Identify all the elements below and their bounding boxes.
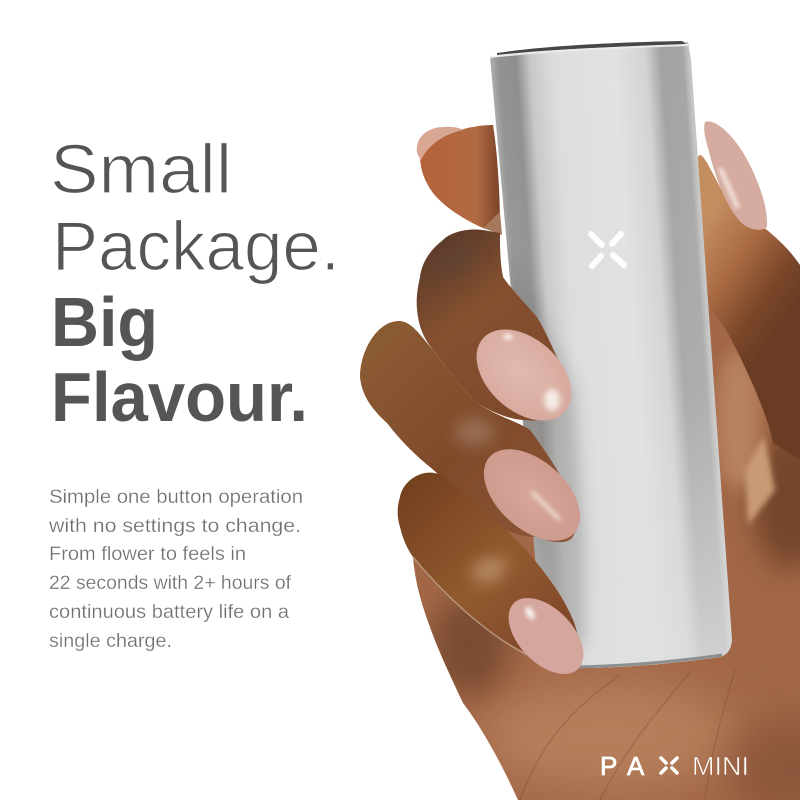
body text: 22 seconds with 2+ hours of	[49, 573, 292, 594]
headline: Flavour.	[51, 358, 308, 436]
hand photo illustration	[360, 41, 800, 800]
ring finger	[398, 473, 597, 688]
headline: Big	[51, 283, 158, 361]
index finger	[417, 230, 589, 439]
body text: single charge.	[49, 631, 172, 652]
body text: continuous battery life on a	[49, 602, 289, 623]
icon: PAX logo on device	[591, 234, 624, 266]
brand logo: PAX MINI: A	[627, 751, 645, 781]
nail: right finger	[704, 121, 767, 230]
nail: ring finger	[495, 584, 597, 688]
palm	[413, 280, 800, 800]
nail: thumb	[417, 127, 464, 160]
body text	[48, 487, 303, 652]
brand logo: PAX MINI	[600, 751, 749, 781]
headline: Small	[50, 130, 232, 208]
brand logo: PAX MINI: P	[600, 751, 617, 781]
shadow of fingers on device	[505, 250, 585, 668]
middle finger	[360, 321, 597, 558]
icon: PAX X mark	[661, 758, 677, 773]
finger crease between ring finger and palm	[413, 557, 527, 655]
device body	[490, 41, 732, 668]
headline	[50, 130, 340, 436]
nail: index finger	[459, 311, 589, 439]
headline: Package.	[52, 207, 340, 285]
body text: Simple one button operation	[49, 487, 303, 508]
nail: middle finger	[467, 432, 597, 558]
thumb	[417, 125, 502, 235]
body text: From flower to feels in	[49, 544, 246, 565]
body text: with no settings to change.	[48, 516, 301, 537]
brand logo: PAX MINI: MINI	[692, 751, 749, 781]
right finger behind device	[698, 121, 800, 460]
